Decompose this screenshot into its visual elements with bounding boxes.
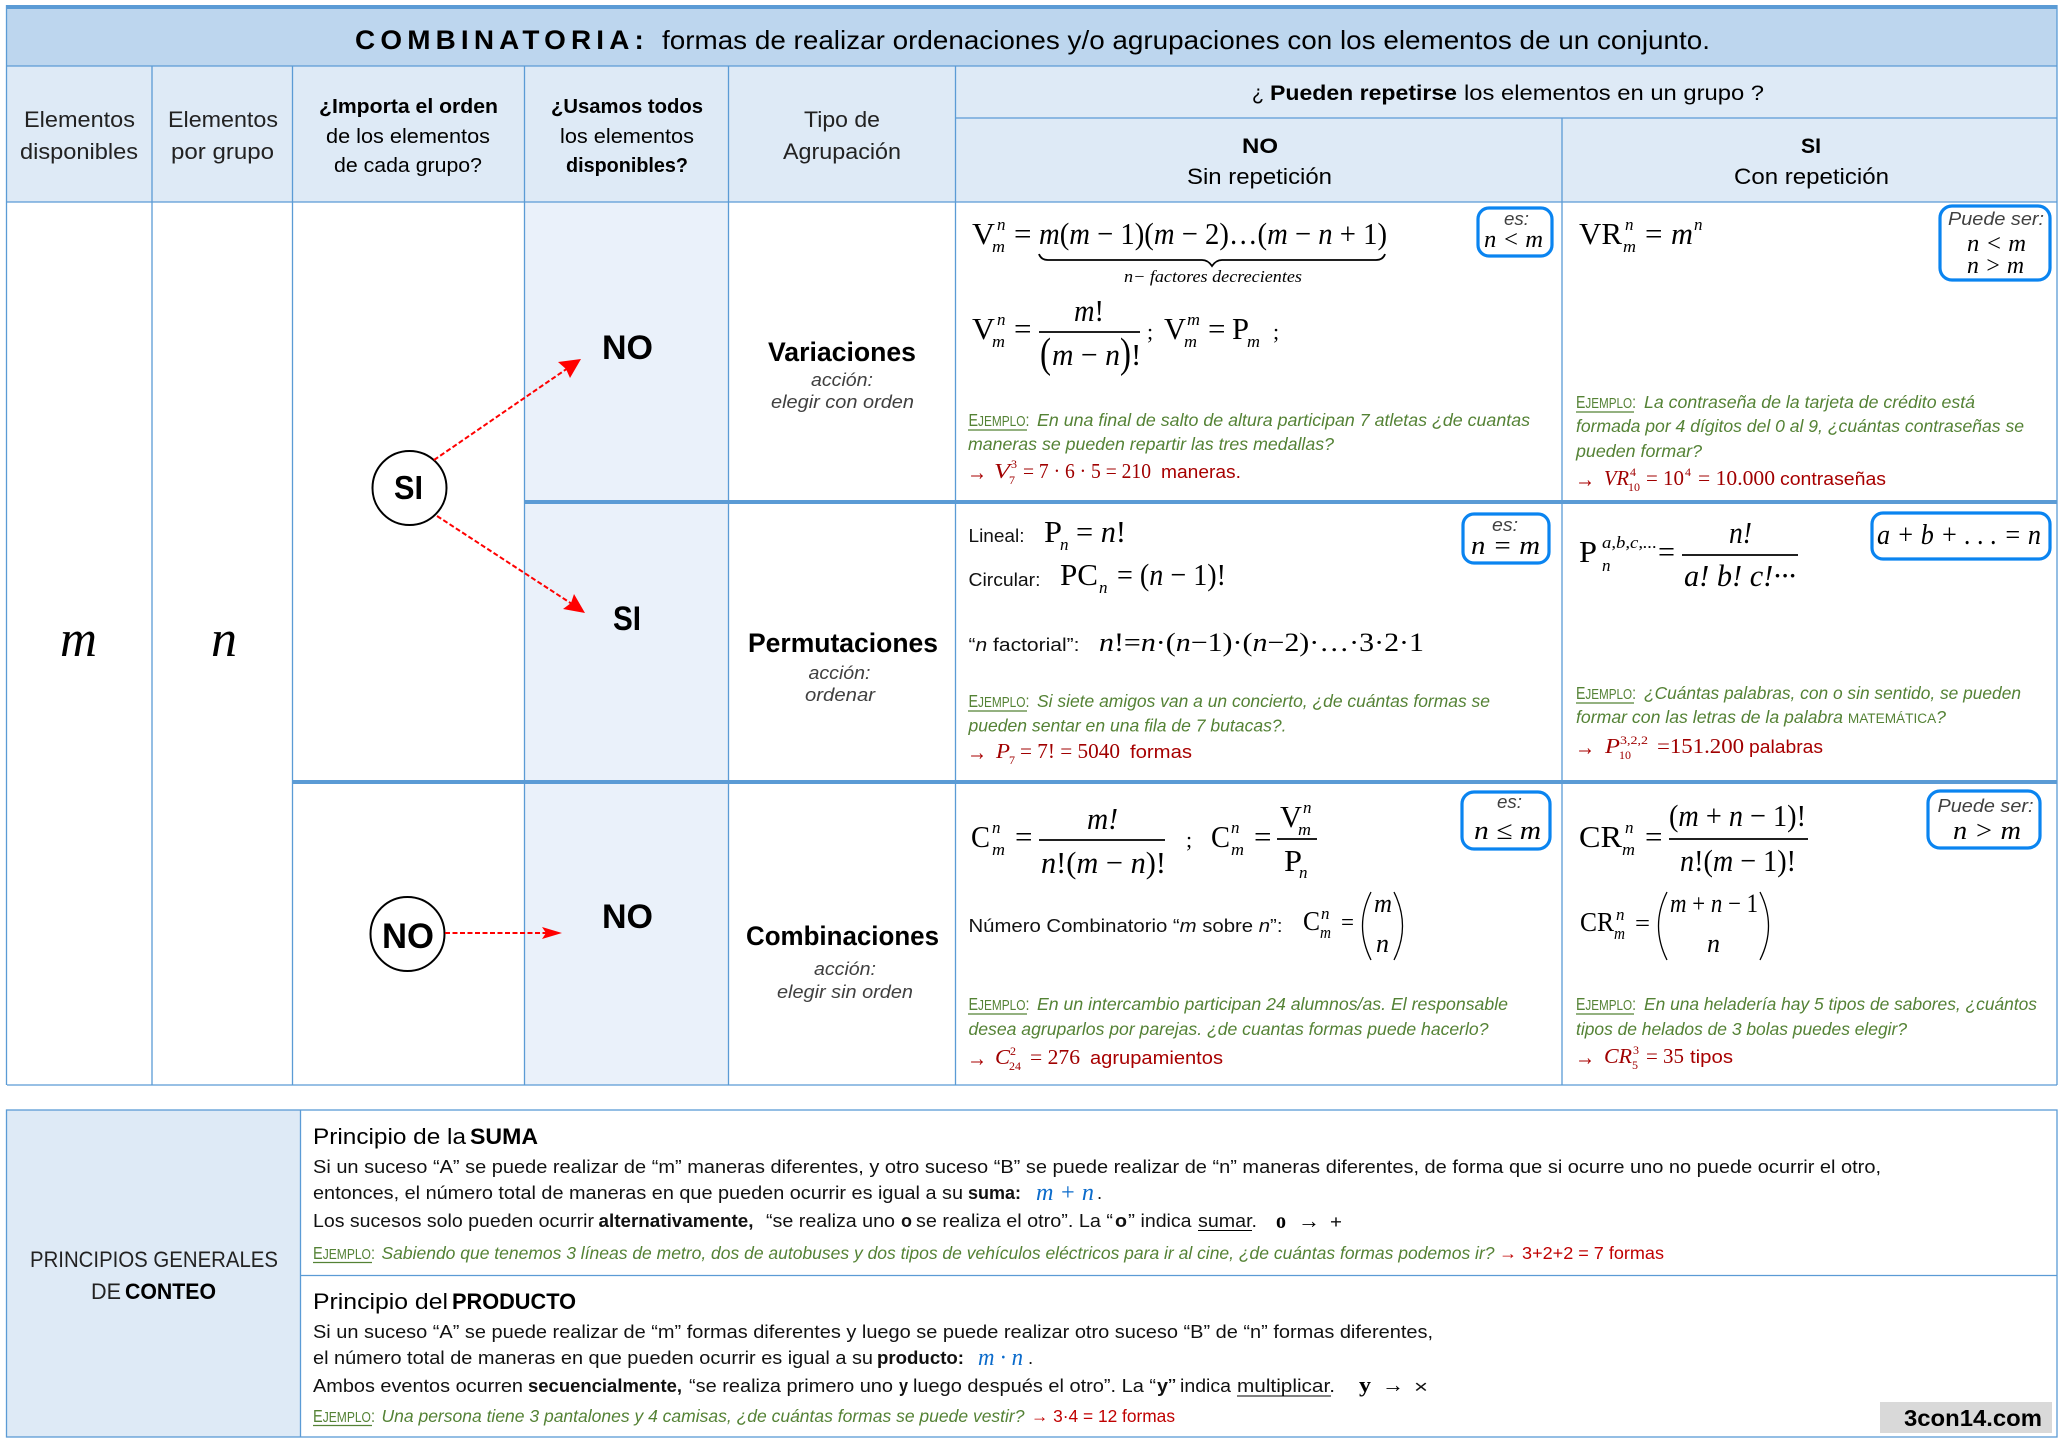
- header: elementos por grupo: Elementos: [168, 107, 278, 132]
- title: COMBINATORIA:: [355, 25, 649, 55]
- header: elementos por grupo: por grupo: [171, 139, 274, 164]
- formula: VR: n: [1694, 215, 1702, 234]
- formula: CR fraction: n!(m − 1)!: [1680, 843, 1796, 878]
- formula: n factorial: [968, 628, 1424, 657]
- example: password: EJEMPLO:: [1576, 392, 1636, 412]
- formula: multinomial: a,b,c,...: [1602, 533, 1657, 552]
- callout: puede ser n<m n>m: n < m: [1967, 231, 2026, 257]
- result: 210 maneras: V: [994, 459, 1013, 483]
- arrow: SI to NO: [434, 359, 581, 460]
- example: suma: Sabiendo que tenemos 3 líneas de metro, dos de autobuses y dos tipos de vehículos eléctricos para ir al cine, ¿de cuántas formas podemos ir?: [382, 1243, 1495, 1263]
- formula: multinomial: a! b! c!···: [1684, 558, 1796, 593]
- example: matematica: EJEMPLO:: [1576, 683, 1636, 703]
- formula: variations factorial: n: [997, 310, 1006, 329]
- principle: suma: →: [1298, 1208, 1320, 1233]
- example: exchange: desea agruparlos por parejas. ¿de cuantas formas puede hacerlo?: [968, 1019, 1489, 1039]
- heading: principios generales: [30, 1247, 278, 1304]
- formula: numero combinatorio: [968, 889, 1402, 960]
- formula: CR binomial: [1580, 889, 1768, 960]
- example: password: formada por 4 dígitos del 0 al 9, ¿cuántas contraseñas se: [1576, 416, 2024, 436]
- result: 151.200 palabras: 3,2,2: [1620, 733, 1648, 747]
- header: no, sin repeticion: [1187, 135, 1332, 189]
- example: athletes: En una final de salto de altura participan 7 atletas ¿de cuantas: [1037, 410, 1530, 430]
- cell: combinaciones con repeticion: [1575, 791, 2040, 1072]
- formula: circular: [968, 557, 1226, 597]
- example: friends concert: [967, 691, 1490, 736]
- result: 10.000 contrasenas: 10: [1628, 480, 1640, 494]
- result: 10.000 contrasenas: contraseñas: [1780, 469, 1886, 489]
- result: 35 tipos: = 35: [1646, 1044, 1684, 1068]
- formula: CR binomial: n: [1616, 905, 1624, 924]
- principle: suma: m + n: [1036, 1180, 1094, 1206]
- cell: variaciones sin repeticion: [967, 208, 1552, 487]
- principle: suma: ”: [1128, 1210, 1135, 1231]
- principle: producto: Si un suceso “A” se puede realizar de “m” formas diferentes y luego se puede realizar otro suceso “B” de “n” formas diferentes,: [313, 1321, 1433, 1342]
- callout: a+b+...=n: [1872, 513, 2050, 559]
- type: combinaciones: [746, 921, 939, 1002]
- result: 210 maneras: = 7 · 6 · 5 = 210: [1023, 459, 1151, 483]
- principle: suma: Principio de la: [313, 1124, 467, 1149]
- example: producto: EJEMPLO:: [313, 1406, 375, 1426]
- principle: suma: SUMA: [470, 1124, 538, 1149]
- result: 10.000 contrasenas: 4: [1630, 465, 1636, 479]
- formula: variations factorial: !: [1131, 337, 1141, 372]
- result: 210 maneras: 7: [1009, 473, 1015, 487]
- main table background and grid: [6, 5, 2057, 1085]
- type: combinaciones: acción:: [814, 959, 876, 979]
- principle: producto: .: [1028, 1347, 1033, 1368]
- formula: VR: =: [1645, 216, 1662, 251]
- principle: producto: multiplicar.: [1237, 1375, 1335, 1396]
- principle: suma: +: [1330, 1211, 1342, 1232]
- formula: CR binomial: m: [1614, 924, 1625, 943]
- principle: producto: secuencialmente,: [528, 1375, 682, 1396]
- formula: lineal: [968, 514, 1126, 554]
- cell: combinaciones sin repeticion: [967, 792, 1550, 1073]
- callout: n equals m: es:: [1492, 515, 1518, 535]
- formula: variations factorial: [972, 293, 1279, 377]
- type: combinaciones: Combinaciones: [746, 921, 939, 951]
- result: 5040 formas: P: [995, 739, 1010, 763]
- example: matematica: formar con las letras de la palabra MATEMÁTICA?: [1576, 707, 1946, 727]
- formula: variations factorial: m: [992, 332, 1005, 351]
- principle: suma: se realiza el otro”. La “: [916, 1210, 1113, 1231]
- formula: variations product: =: [1014, 216, 1031, 251]
- header: usamos todos: los elementos: [560, 125, 694, 148]
- result: 210 maneras: [967, 457, 1241, 487]
- formula: CR binomial: CR: [1580, 907, 1614, 937]
- result: 276 agrupamientos: = 276: [1030, 1045, 1080, 1069]
- formula: variations factorial: ;: [1147, 319, 1153, 344]
- result: 151.200 palabras: →: [1575, 734, 1595, 761]
- result: 35 tipos: 3: [1633, 1043, 1639, 1057]
- example: password: pueden formar?: [1575, 441, 1702, 461]
- type: variaciones: [768, 337, 916, 412]
- formula: lineal: Lineal:: [968, 525, 1024, 546]
- formula: CR fraction: [1579, 798, 1808, 878]
- result: 35 tipos: [1575, 1043, 1733, 1072]
- formula: combinations: P: [1284, 843, 1302, 878]
- formula: combinations: =: [1015, 819, 1032, 854]
- result: 276 agrupamientos: 24: [1009, 1059, 1021, 1073]
- example: matematica: [1576, 683, 2021, 727]
- arrow: NO to NO: [445, 927, 562, 939]
- formula: variations product: n: [997, 215, 1006, 234]
- example: athletes: maneras se pueden repartir las tres medallas?: [968, 434, 1334, 454]
- principle: suma: indica: [1140, 1210, 1192, 1231]
- formula: VR: m: [1623, 237, 1636, 256]
- result: 151.200 palabras: [1575, 733, 1823, 762]
- formula: circular: PC: [1060, 557, 1098, 592]
- formula: variations factorial: m − n: [1052, 337, 1120, 372]
- result: 10.000 contrasenas: VR: [1604, 466, 1629, 490]
- formula: variations factorial: m: [1247, 332, 1260, 351]
- brace: n factors: [1039, 254, 1385, 266]
- formula: combinations: m: [1231, 840, 1244, 859]
- formula: variations factorial: =: [1208, 311, 1225, 346]
- result: 276 agrupamientos: →: [967, 1045, 987, 1072]
- formula: variations product: m: [992, 237, 1005, 256]
- cell: variaciones con repeticion: [1575, 206, 2050, 494]
- example: athletes: [968, 410, 1530, 454]
- example: ice cream: tipos de helados de 3 bolas puedes elegir?: [1576, 1019, 1907, 1039]
- header: pueden repetirse: Pueden repetirse: [1270, 82, 1457, 105]
- principle: producto: y: [1359, 1372, 1371, 1397]
- principle: producto: luego después el otro”. La “: [913, 1375, 1156, 1396]
- example: producto: → 3·4 = 12 formas: [1031, 1406, 1175, 1426]
- formula: variations factorial: ;: [1273, 319, 1279, 344]
- callout: puede ser n>m: n > m: [1953, 816, 2021, 845]
- formula: variations factorial: ): [1120, 331, 1131, 377]
- formula: variations factorial: P: [1232, 311, 1249, 346]
- formula: combinations: m: [992, 840, 1005, 859]
- formula: combinations: [971, 798, 1317, 882]
- formula: numero combinatorio: n: [1376, 929, 1389, 958]
- example: friends concert: pueden sentar en una fila de 7 butacas?.: [967, 716, 1286, 736]
- formula: CR fraction: (m + n − 1)!: [1669, 798, 1806, 833]
- answer NO row 3: NO: [602, 898, 653, 936]
- result: 276 agrupamientos: 2: [1010, 1044, 1016, 1058]
- principle: producto: PRODUCTO: [452, 1289, 576, 1314]
- type: permutaciones: acción:: [808, 663, 870, 683]
- header: importa el orden: de cada grupo?: [334, 154, 482, 177]
- example: ice cream: [1576, 994, 2037, 1039]
- callout: n less or equal m: [1462, 792, 1550, 849]
- result: 210 maneras: maneras.: [1161, 462, 1241, 482]
- principle: producto: y: [1157, 1375, 1169, 1396]
- formula: numero combinatorio: m: [1374, 889, 1392, 918]
- principle: producto: “se realiza primero uno: [689, 1375, 893, 1396]
- formula: multinomial: [1579, 515, 1798, 593]
- formula: numero combinatorio: m: [1320, 923, 1331, 942]
- result: 35 tipos: →: [1575, 1044, 1595, 1071]
- principle: producto: el número total de maneras en que pueden ocurrir es igual a su: [313, 1347, 873, 1368]
- variable m: m: [60, 611, 97, 668]
- principle: suma: sumar.: [1198, 1210, 1257, 1231]
- formula: combinations: m: [1298, 820, 1311, 839]
- principle: producto: producto:: [877, 1347, 964, 1368]
- formula: VR: n: [1625, 215, 1634, 234]
- header: usamos todos: disponibles?: [566, 154, 688, 177]
- callout: n equals m: n = m: [1471, 531, 1540, 560]
- formula: combinations: =: [1254, 819, 1271, 854]
- formula: combinations: m!: [1087, 801, 1118, 836]
- formula: CR fraction: =: [1645, 819, 1662, 854]
- result: 210 maneras: 3: [1011, 457, 1017, 471]
- header: tipo de agrupacion: Tipo de: [804, 107, 880, 132]
- result: 5040 formas: formas: [1130, 742, 1192, 762]
- result: 10.000 contrasenas: = 10.000: [1698, 466, 1775, 490]
- formula: numero combinatorio: =: [1341, 910, 1354, 936]
- principle: suma: [313, 1124, 1881, 1233]
- header: importa el orden: [319, 95, 498, 177]
- watermark: 3con14.com: 3con14.com: [1904, 1405, 2042, 1431]
- result: 10.000 contrasenas: [1575, 465, 1886, 494]
- formula: CR fraction: n: [1625, 818, 1634, 837]
- callout: n less than m: [1478, 208, 1552, 256]
- type: permutaciones: [748, 628, 938, 705]
- type: variaciones: acción:: [811, 370, 873, 390]
- callout: n less or equal m: n ≤ m: [1474, 816, 1541, 845]
- formula: variations factorial: (: [1040, 331, 1051, 377]
- header: si, con repeticion: Con repetición: [1734, 164, 1889, 189]
- example: suma: EJEMPLO:: [313, 1243, 375, 1263]
- formula: variations factorial: m!: [1074, 293, 1104, 328]
- formula: combinations: ;: [1186, 827, 1192, 852]
- formula: multinomial: P: [1579, 534, 1597, 569]
- type: permutaciones: Permutaciones: [748, 628, 938, 658]
- principle: suma: Si un suceso “A” se puede realizar de “m” maneras diferentes, y otro suceso “B” se puede realizar de “n” maneras diferentes, de forma que si ocurre uno no puede ocurrir el otro,: [313, 1156, 1881, 1177]
- header: si, con repeticion: SI: [1801, 135, 1821, 158]
- example: ice cream: En una heladería hay 5 tipos de sabores, ¿cuántos: [1644, 994, 2037, 1014]
- result: 210 maneras: →: [967, 459, 987, 486]
- example: matematica: ¿Cuántas palabras, con o sin sentido, se pueden: [1644, 683, 2021, 703]
- result: 5040 formas: 7: [1009, 753, 1015, 767]
- principle: producto: m · n: [978, 1345, 1023, 1371]
- header: elementos por grupo: [168, 107, 278, 164]
- example: suma: → 3+2+2 = 7 formas: [1499, 1243, 1664, 1263]
- formula: n factorial: n!=n·(n−1)·( n−2)·…·3·2·1: [1099, 628, 1424, 657]
- result: 10.000 contrasenas: 4: [1685, 465, 1691, 479]
- formula: combinations: n: [1231, 818, 1240, 837]
- formula: lineal: n: [1060, 535, 1068, 554]
- example: ice cream: EJEMPLO:: [1576, 994, 1636, 1014]
- result: 5040 formas: →: [967, 739, 987, 766]
- result: 151.200 palabras: P: [1604, 734, 1620, 758]
- example: exchange: [968, 994, 1508, 1039]
- variable n: n: [211, 611, 237, 668]
- result: 151.200 palabras: palabras: [1749, 737, 1823, 757]
- formula: CR fraction: CR: [1579, 819, 1622, 854]
- callout: n less than m: es:: [1504, 209, 1529, 229]
- circle SI: [372, 451, 446, 525]
- header: si, con repeticion: [1734, 135, 1889, 189]
- principle: producto: y: [899, 1375, 909, 1396]
- circle SI: SI: [394, 469, 423, 506]
- formula: numero combinatorio: Número Combinatorio “ m sobre n”:: [968, 915, 1282, 936]
- header: pueden repetirse: ¿: [1252, 82, 1264, 105]
- formula: variations factorial: V: [1164, 311, 1187, 346]
- label: n factores decrecientes: n− factores decrecientes: [1124, 267, 1302, 286]
- formula: variations factorial: m: [1184, 332, 1197, 351]
- arrow: SI to SI: [437, 516, 585, 613]
- example: password: [1575, 392, 2024, 461]
- header: importa el orden: de los elementos: [326, 125, 490, 148]
- header: tipo de agrupacion: [783, 107, 901, 164]
- formula: combinations: n: [1299, 863, 1308, 882]
- formula: lineal: = n!: [1076, 514, 1126, 549]
- principle: producto: →: [1382, 1372, 1404, 1397]
- example: exchange: EJEMPLO:: [968, 994, 1030, 1014]
- formula: numero combinatorio: C: [1303, 906, 1320, 936]
- header: usamos todos: ¿Usamos todos: [551, 95, 703, 118]
- panel: principios generales de conteo: [6, 1110, 2057, 1437]
- callout: n equals m: [1463, 514, 1549, 563]
- header: no, sin repeticion: Sin repetición: [1187, 164, 1332, 189]
- callout: puede ser n<m n>m: n > m: [1967, 253, 2024, 279]
- callout: n less or equal m: es:: [1497, 792, 1522, 812]
- type: variaciones: elegir con orden: [771, 392, 914, 412]
- formula: variations factorial: =: [1014, 311, 1031, 346]
- principle: producto: Ambos eventos ocurren: [313, 1375, 523, 1396]
- principle: suma: o: [901, 1210, 912, 1231]
- principle: producto: Principio del: [313, 1289, 448, 1314]
- principle: producto: [313, 1289, 1433, 1397]
- header: elementos disponibles: Elementos: [24, 107, 135, 132]
- callout: puede ser n>m: [1928, 791, 2040, 848]
- type: combinaciones: elegir sin orden: [777, 982, 913, 1002]
- formula: VR: [1579, 215, 1702, 256]
- formula: combinations: C: [971, 819, 990, 854]
- principle: suma: entonces, el número total de maneras en que pueden ocurrir es igual a su: [313, 1182, 963, 1203]
- cell: permutaciones con repeticion: [1575, 513, 2050, 762]
- callout: puede ser n<m n>m: Puede ser:: [1948, 209, 2044, 229]
- answer SI row 2: SI: [613, 600, 641, 638]
- result: 35 tipos: tipos: [1690, 1047, 1733, 1067]
- header: pueden repetirse: [1252, 82, 1764, 105]
- principle: suma: “se realiza uno: [766, 1210, 895, 1231]
- formula: VR: VR: [1579, 216, 1622, 251]
- title: formas de realizar ordenaciones y/o agrupaciones con los elementos de un conjunto.: [662, 25, 1710, 55]
- result: 276 agrupamientos: C: [995, 1045, 1011, 1069]
- example: friends concert: EJEMPLO:: [968, 691, 1030, 711]
- result: 151.200 palabras: 10: [1619, 748, 1631, 762]
- callout: n less than m: n < m: [1484, 227, 1543, 253]
- circle NO: NO: [382, 917, 434, 956]
- formula: combinations: C: [1211, 819, 1230, 854]
- principle: suma: o: [1276, 1208, 1286, 1233]
- formula: combinations: n: [992, 818, 1000, 837]
- result: 35 tipos: CR: [1604, 1044, 1632, 1068]
- result: 276 agrupamientos: [967, 1044, 1223, 1073]
- principle: suma: o: [1115, 1210, 1127, 1231]
- example: password: La contraseña de la tarjeta de crédito está: [1644, 392, 1975, 412]
- formula: CR binomial: m + n − 1: [1670, 889, 1758, 918]
- example: producto: Una persona tiene 3 pantalones y 4 camisas, ¿de cuántas formas se puede vestir?: [382, 1406, 1025, 1426]
- header: elementos disponibles: [20, 107, 138, 164]
- formula: n factorial: “n factorial”:: [968, 634, 1080, 655]
- formula: circular: n: [1099, 578, 1108, 597]
- formula: multinomial: =: [1658, 534, 1675, 569]
- result: 10.000 contrasenas: →: [1575, 466, 1595, 493]
- result: 10.000 contrasenas: = 10: [1646, 466, 1684, 490]
- formula: lineal: P: [1044, 514, 1062, 549]
- header: usamos todos: [551, 95, 703, 177]
- principle: producto: indica: [1180, 1375, 1232, 1396]
- heading: principios generales: PRINCIPIOS GENERALES: [30, 1247, 278, 1272]
- formula: combinations: n: [1303, 798, 1312, 817]
- heading: principios generales: DE: [91, 1279, 121, 1304]
- principle: producto: ”: [1168, 1375, 1176, 1396]
- example: exchange: En un intercambio participan 24 alumnos/as. El responsable: [1037, 994, 1508, 1014]
- formula: variations factorial: V: [972, 311, 996, 346]
- result: 5040 formas: = 7! = 5040: [1020, 739, 1120, 763]
- principle: producto: ×: [1414, 1376, 1428, 1397]
- cell: permutaciones sin repeticion: [967, 514, 1549, 767]
- formula: circular: Circular:: [968, 569, 1040, 590]
- formula: combinations: n!(m − n)!: [1041, 845, 1166, 880]
- callout: puede ser n<m n>m: [1940, 206, 2050, 280]
- callout: puede ser n>m: Puede ser:: [1938, 796, 2034, 816]
- result: 5040 formas: [967, 739, 1192, 767]
- type: permutaciones: ordenar: [805, 685, 876, 705]
- principle: suma: .: [1097, 1182, 1102, 1203]
- watermark: 3con14.com: [1880, 1402, 2052, 1433]
- header: importa el orden: ¿Importa el orden: [319, 95, 498, 118]
- principle: suma: suma:: [968, 1182, 1021, 1203]
- formula: CR binomial: =: [1635, 911, 1650, 937]
- principle: suma: alternativamente,: [598, 1210, 754, 1231]
- formula: numero combinatorio: n: [1321, 904, 1330, 923]
- formula: combinations: V: [1280, 799, 1303, 834]
- formula: multinomial: n: [1602, 556, 1610, 575]
- result: 151.200 palabras: =151.200: [1657, 734, 1744, 758]
- result: 276 agrupamientos: agrupamientos: [1090, 1048, 1223, 1068]
- callout: a+b+...=n: a + b + . . . = n: [1877, 520, 2041, 551]
- formula: CR binomial: n: [1707, 929, 1720, 958]
- formula: multinomial: n!: [1729, 515, 1752, 550]
- formula: variations product: V: [972, 216, 996, 251]
- type: variaciones: Variaciones: [768, 337, 916, 367]
- example: athletes: EJEMPLO:: [968, 410, 1030, 430]
- formula: variations factorial: m: [1187, 310, 1200, 329]
- header: pueden repetirse: los elementos en un grupo ?: [1464, 82, 1764, 105]
- formula: circular: = (n − 1)!: [1117, 557, 1226, 592]
- panel frame: [6, 1110, 2057, 1437]
- header: elementos disponibles: disponibles: [20, 139, 138, 164]
- principle: suma: Los sucesos solo pueden ocurrir: [313, 1210, 594, 1231]
- header: tipo de agrupacion: Agrupación: [783, 139, 901, 164]
- formula: variations product: m(m − 1)(m − 2)…(m − n + 1): [1039, 216, 1387, 251]
- heading: principios generales: CONTEO: [125, 1279, 216, 1304]
- header: no, sin repeticion: NO: [1242, 135, 1278, 158]
- example: friends concert: Si siete amigos van a un concierto, ¿de cuántas formas se: [1037, 691, 1490, 711]
- formula: VR: m: [1671, 216, 1693, 251]
- circle NO: [370, 897, 444, 971]
- result: 35 tipos: 5: [1632, 1058, 1638, 1072]
- answer NO row 1: NO: [602, 329, 653, 367]
- formula: CR fraction: m: [1622, 840, 1635, 859]
